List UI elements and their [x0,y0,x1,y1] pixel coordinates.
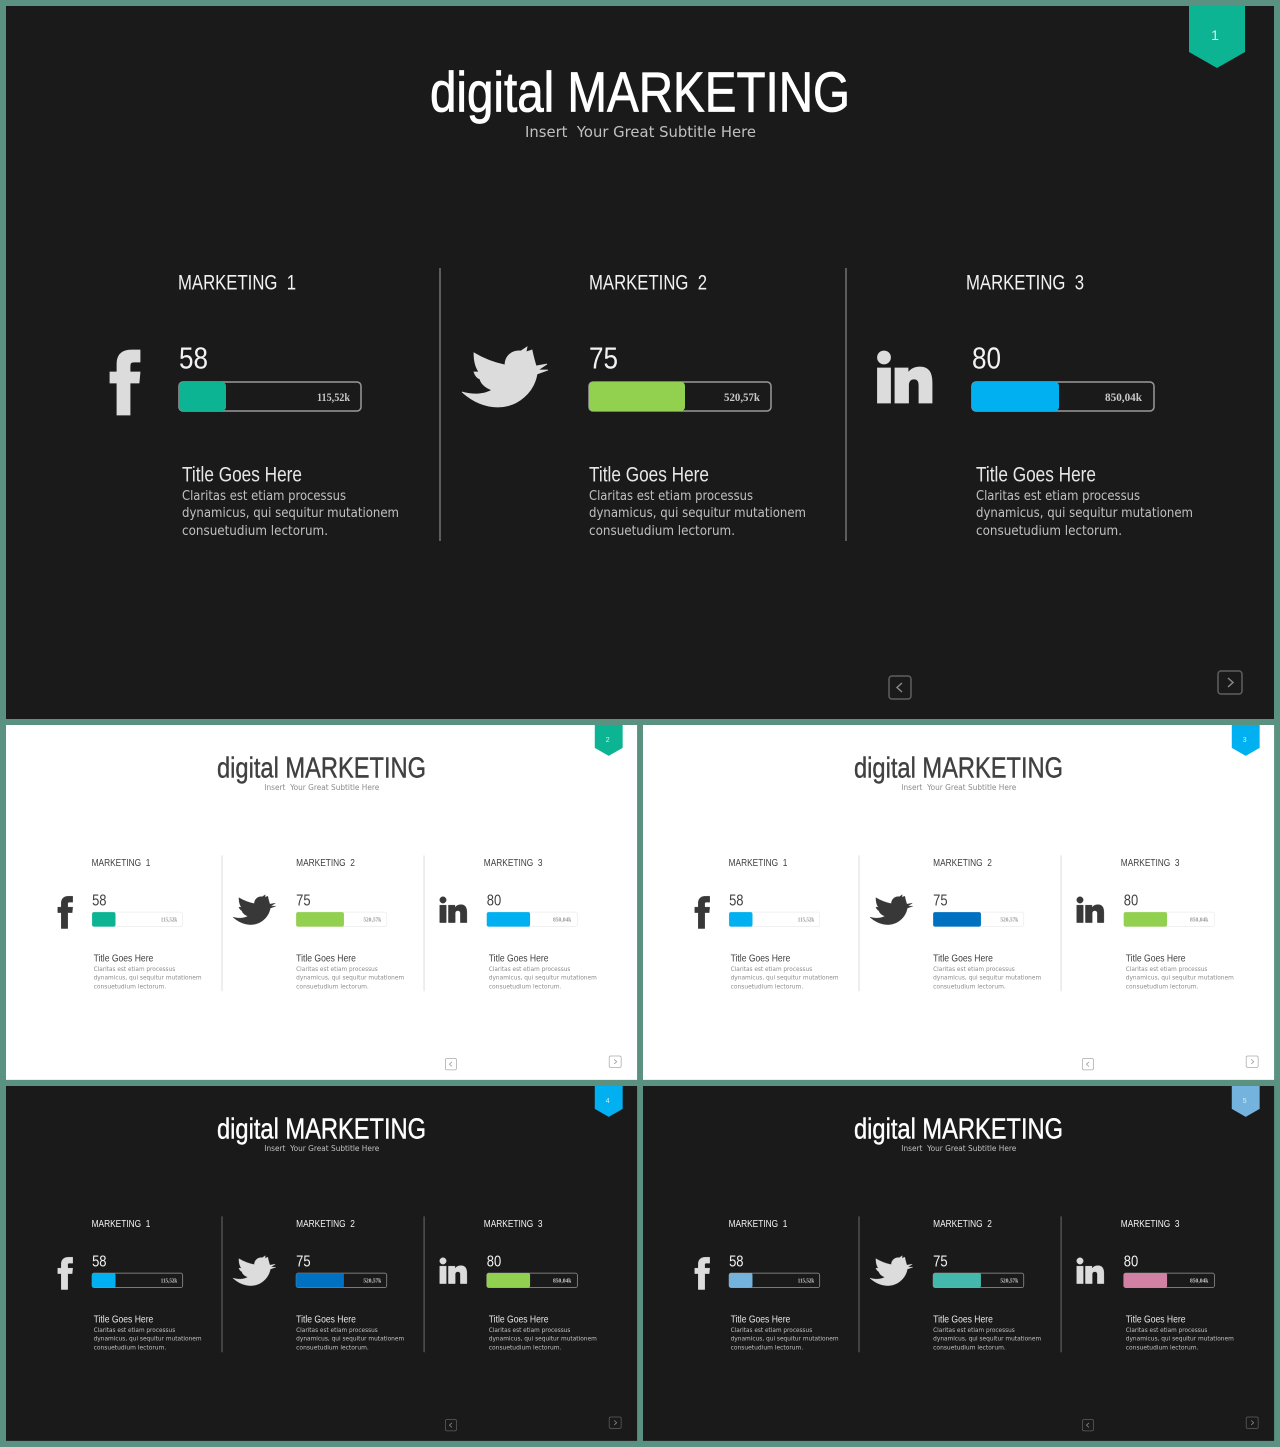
heading: MARKETING 1 [729,1219,787,1230]
text block: Title Goes Here [976,464,1096,486]
text block: consuetudium lectorum. [489,1343,561,1351]
value: 58 [92,893,107,910]
text block: Claritas est etiam processus [94,1326,176,1334]
text block: Claritas est etiam processus [1126,965,1208,973]
icon: facebook [695,896,710,929]
progress bar [589,382,771,411]
column: marketing 1 [695,1219,839,1351]
progress bar: 850,04k [1190,1279,1209,1285]
heading: MARKETING 2 [933,1219,992,1230]
nav: next [1218,671,1242,694]
value: 80 [487,1254,501,1271]
column: marketing 2 [462,272,806,539]
text block: consuetudium lectorum. [933,982,1006,990]
column: marketing 3 [1077,1219,1234,1351]
panel: slide 1 dark [6,6,1274,719]
text block: Claritas est etiam processus [731,965,813,973]
text block: consuetudium lectorum. [731,1343,803,1351]
heading: MARKETING 1 [92,858,150,869]
value: 58 [92,1254,107,1271]
text block: Claritas est etiam processus [94,965,176,973]
text block: Claritas est etiam processus [731,1326,813,1334]
nav: previous [1082,1419,1093,1431]
text block: consuetudium lectorum. [976,524,1122,539]
text block: dynamicus, qui sequitur mutationem [296,973,404,981]
column: marketing 3 [440,1219,597,1351]
value: 75 [933,1254,948,1271]
value: 58 [729,1254,744,1271]
text block: consuetudium lectorum. [933,1343,1006,1351]
page tag 5: 5 [1243,1098,1247,1105]
panel: slide 5 dark [643,1086,1274,1441]
column: marketing 3 [878,272,1193,539]
subtitle: Insert Your Great Subtitle Here [264,783,380,792]
progress bar [933,912,1024,927]
heading: MARKETING 2 [296,858,355,869]
text block [1126,1315,1234,1351]
text block: Claritas est etiam processus [589,489,753,504]
icon: linkedin [878,351,932,403]
progress bar: 115,52k [161,918,178,924]
heading: MARKETING 3 [1121,1219,1180,1230]
page tag 1: 1 [1211,27,1219,43]
progress bar: 520,57k [724,392,761,404]
text block: dynamicus, qui sequitur mutationem [1126,1334,1234,1342]
text block: Title Goes Here [182,464,302,486]
nav: previous [445,1419,456,1431]
page tag 1 [1189,6,1245,68]
value: 75 [589,340,618,376]
text block: dynamicus, qui sequitur mutationem [933,1334,1041,1342]
progress bar: 850,04k [553,918,572,924]
value: 80 [487,893,501,910]
text block: Claritas est etiam processus [489,1326,571,1334]
nav: previous [1082,1058,1093,1070]
text block: dynamicus, qui sequitur mutationem [731,1334,839,1342]
heading: MARKETING 2 [296,1219,355,1230]
page tag 2 [595,725,623,756]
progress bar [729,1273,820,1288]
icon: twitter bird [870,1256,913,1286]
text block: Title Goes Here [94,1315,153,1326]
icon: linkedin [1077,897,1104,923]
value: 75 [296,893,311,910]
text block [933,954,1041,990]
progress bar: 520,57k [363,1279,382,1285]
column: marketing 1 [695,858,839,990]
text block: consuetudium lectorum. [94,1343,166,1351]
column: marketing 1 [110,272,399,539]
heading: MARKETING 1 [178,272,296,294]
page tag 3: 3 [1243,737,1247,744]
progress bar [92,1273,183,1288]
subtitle: Insert Your Great Subtitle Here [525,123,756,141]
progress bar: 850,04k [1190,918,1209,924]
progress bar: 850,04k [553,1279,572,1285]
text block: Claritas est etiam processus [296,1326,378,1334]
title: digital MARKETING [854,1114,1063,1146]
text block: consuetudium lectorum. [182,524,328,539]
text block [976,464,1193,539]
progress bar [296,1273,387,1288]
nav: previous [889,676,911,699]
page tag 4: 4 [606,1098,610,1105]
column: marketing 2 [233,858,404,990]
subtitle: Insert Your Great Subtitle Here [901,783,1017,792]
nav: next [1246,1417,1258,1428]
heading: MARKETING 3 [484,1219,543,1230]
text block: dynamicus, qui sequitur mutationem [94,1334,202,1342]
text block: Title Goes Here [589,464,709,486]
text block [296,1315,404,1351]
progress bar: 115,52k [798,1279,815,1285]
nav: next [609,1417,621,1428]
panel: slide 4 dark [6,1086,637,1441]
text block: Claritas est etiam processus [182,489,346,504]
progress bar [972,382,1154,411]
text block: Title Goes Here [296,954,356,965]
text block [589,464,806,539]
subtitle: Insert Your Great Subtitle Here [264,1144,380,1153]
text block [94,954,202,990]
value: 75 [296,1254,311,1271]
text block [489,1315,597,1351]
text block [933,1315,1041,1351]
text block: Title Goes Here [731,1315,790,1326]
text block: Title Goes Here [731,954,790,965]
heading: MARKETING 1 [729,858,787,869]
heading: MARKETING 2 [589,272,707,294]
text block: consuetudium lectorum. [731,982,803,990]
progress bar: 520,57k [1000,918,1019,924]
progress bar: 520,57k [1000,1279,1019,1285]
heading: MARKETING 2 [933,858,992,869]
text block: Claritas est etiam processus [933,965,1015,973]
text block [1126,954,1234,990]
text block: dynamicus, qui sequitur mutationem [1126,973,1234,981]
value: 80 [1124,1254,1138,1271]
text block [489,954,597,990]
column: marketing 2 [870,1219,1041,1351]
text block [296,954,404,990]
progress bar [933,1273,1024,1288]
icon: twitter bird [870,895,913,925]
text block: Claritas est etiam processus [489,965,571,973]
progress bar [179,382,361,411]
text block: dynamicus, qui sequitur mutationem [296,1334,404,1342]
progress bar: 115,52k [798,918,815,924]
icon: facebook [58,896,73,929]
icon: linkedin [440,1258,467,1284]
page tag 5 [1232,1086,1260,1117]
progress bar: 850,04k [1105,392,1143,404]
column: marketing 3 [440,858,597,990]
icon: twitter bird [233,895,276,925]
heading: MARKETING 3 [1121,858,1180,869]
heading: MARKETING 1 [92,1219,150,1230]
progress bar [1124,1273,1214,1288]
value: 75 [933,893,948,910]
text block: dynamicus, qui sequitur mutationem [933,973,1041,981]
title: digital MARKETING [854,753,1063,785]
title: digital MARKETING [217,753,426,785]
progress bar [296,912,387,927]
value: 80 [972,340,1001,376]
text block: Title Goes Here [933,954,993,965]
text block: consuetudium lectorum. [489,982,561,990]
icon: linkedin [440,897,467,923]
column: marketing 2 [233,1219,404,1351]
page tag 2: 2 [606,737,610,744]
text block [94,1315,202,1351]
text block: Title Goes Here [1126,1315,1186,1326]
text block: Claritas est etiam processus [296,965,378,973]
text block: dynamicus, qui sequitur mutationem [589,506,806,521]
progress bar: 115,52k [161,1279,178,1285]
text block: consuetudium lectorum. [296,1343,369,1351]
text block: dynamicus, qui sequitur mutationem [182,506,399,521]
text block: Title Goes Here [1126,954,1186,965]
text block: consuetudium lectorum. [589,524,735,539]
icon: facebook [695,1257,710,1290]
column: marketing 1 [58,858,202,990]
text block: dynamicus, qui sequitur mutationem [976,506,1193,521]
text block: Title Goes Here [489,1315,549,1326]
progress bar: 520,57k [363,918,382,924]
icon: twitter bird [462,347,548,407]
nav: next [1246,1056,1258,1067]
progress bar [487,912,577,927]
text block: Title Goes Here [489,954,549,965]
text block: dynamicus, qui sequitur mutationem [489,973,597,981]
progress bar: 115,52k [317,392,351,404]
value: 80 [1124,893,1138,910]
panel: slide 2 light [6,725,637,1080]
text block [731,954,839,990]
title: digital MARKETING [217,1114,426,1146]
column: marketing 3 [1077,858,1234,990]
page tag 4 [595,1086,623,1117]
text block: Claritas est etiam processus [976,489,1140,504]
panel: slide 3 light [643,725,1274,1080]
text block: dynamicus, qui sequitur mutationem [94,973,202,981]
icon: facebook [58,1257,73,1290]
text block: Title Goes Here [296,1315,356,1326]
text block: consuetudium lectorum. [296,982,369,990]
text block: Claritas est etiam processus [1126,1326,1208,1334]
icon: facebook [110,350,140,415]
progress bar [92,912,183,927]
text block: Title Goes Here [94,954,153,965]
nav: previous [445,1058,456,1070]
value: 58 [179,340,208,376]
progress bar [729,912,820,927]
subtitle: Insert Your Great Subtitle Here [901,1144,1017,1153]
progress bar [1124,912,1214,927]
icon: twitter bird [233,1256,276,1286]
title: digital MARKETING [430,60,850,124]
text block: dynamicus, qui sequitur mutationem [489,1334,597,1342]
text block: Title Goes Here [933,1315,993,1326]
column: marketing 2 [870,858,1041,990]
page tag 3 [1232,725,1260,756]
icon: linkedin [1077,1258,1104,1284]
value: 58 [729,893,744,910]
text block: consuetudium lectorum. [1126,1343,1198,1351]
heading: MARKETING 3 [966,272,1084,294]
text block: Claritas est etiam processus [933,1326,1015,1334]
heading: MARKETING 3 [484,858,543,869]
progress bar [487,1273,577,1288]
column: marketing 1 [58,1219,202,1351]
text block: consuetudium lectorum. [94,982,166,990]
text block: dynamicus, qui sequitur mutationem [731,973,839,981]
text block: consuetudium lectorum. [1126,982,1198,990]
text block [731,1315,839,1351]
nav: next [609,1056,621,1067]
text block [182,464,399,539]
